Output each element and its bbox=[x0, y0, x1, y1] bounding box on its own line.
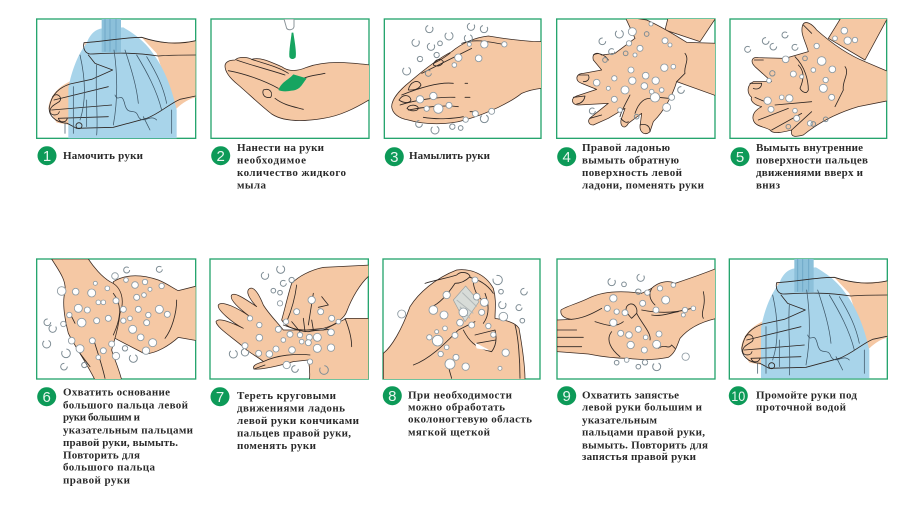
badge 4 bbox=[557, 147, 576, 166]
panel 2: applying liquid soap bbox=[211, 19, 370, 138]
badge 10: 10 bbox=[731, 388, 745, 404]
caption 6: руки большим и bbox=[63, 412, 141, 424]
caption 4: вымыть обратную bbox=[582, 154, 679, 166]
badge 4: 4 bbox=[563, 149, 571, 166]
caption 6 bbox=[63, 387, 194, 486]
badge 10 bbox=[729, 386, 748, 405]
caption 2: Нанести на руки bbox=[237, 142, 325, 154]
step 2 bbox=[211, 19, 370, 191]
badge 7 bbox=[210, 387, 230, 406]
caption 4: ладони, поменять руки bbox=[582, 179, 705, 191]
caption 10 bbox=[756, 389, 857, 414]
caption 7: левой руки кончиками bbox=[237, 415, 360, 427]
step 6 bbox=[37, 259, 197, 486]
caption 5: Вымыть внутренние bbox=[756, 142, 863, 154]
caption 7: поменять руки bbox=[237, 440, 317, 452]
step 9 bbox=[557, 259, 717, 463]
caption 2 bbox=[237, 142, 346, 191]
badge 7: 7 bbox=[216, 389, 224, 406]
badge 1 bbox=[38, 146, 56, 165]
caption 4: поверхность левой bbox=[582, 167, 683, 179]
caption 8: мягкой щеткой bbox=[408, 426, 491, 438]
caption 7: движениями ладонь bbox=[237, 403, 345, 415]
step 7 bbox=[210, 259, 370, 452]
step 5 bbox=[730, 17, 888, 191]
caption 6: большого пальца bbox=[63, 462, 156, 474]
step 4 bbox=[557, 17, 717, 191]
badge 2: 2 bbox=[217, 148, 225, 165]
caption 6: большого пальца левой bbox=[63, 399, 189, 411]
panel 4: washing back of left hand bbox=[557, 17, 717, 138]
badge 9 bbox=[557, 386, 576, 405]
caption 9: указательным bbox=[582, 414, 658, 426]
caption 9: пальцами правой руки, bbox=[582, 427, 705, 439]
caption 6: указательным пальцами bbox=[63, 424, 194, 436]
badge 8: 8 bbox=[388, 388, 396, 405]
badge 3: 3 bbox=[390, 149, 398, 166]
caption 9: левой руки большим и bbox=[582, 402, 703, 414]
badge 9: 9 bbox=[563, 388, 571, 405]
caption 8: околоногтевую область bbox=[408, 414, 532, 426]
panel 5: washing inner finger surfaces bbox=[730, 17, 888, 138]
badge 8 bbox=[383, 386, 402, 405]
caption 10: проточной водой bbox=[756, 402, 847, 414]
badge 1: 1 bbox=[43, 148, 51, 165]
step 3 bbox=[384, 19, 542, 166]
caption 7: пальцев правой руки, bbox=[237, 428, 351, 440]
caption 8: можно обработать bbox=[408, 402, 505, 414]
badge 3 bbox=[385, 147, 404, 166]
caption 10: Промойте руки под bbox=[756, 389, 857, 401]
step 1 bbox=[37, 19, 196, 165]
panel 10: rinsing under running water bbox=[729, 259, 888, 379]
step 10 bbox=[729, 259, 888, 414]
caption 5: поверхности пальцев bbox=[756, 154, 868, 166]
caption 2: мыла bbox=[237, 179, 266, 191]
caption 9: вымыть. Повторить для bbox=[582, 439, 708, 451]
badge 5 bbox=[730, 147, 750, 166]
badge 6 bbox=[37, 387, 56, 406]
caption 6: правой руки, вымыть. bbox=[63, 437, 178, 449]
caption 6: Повторить для bbox=[63, 449, 140, 461]
panel 1: wetting hands under water bbox=[37, 19, 196, 138]
caption 1: Намочить руки bbox=[63, 150, 144, 162]
caption 6: Охватить основание bbox=[63, 387, 170, 399]
caption 3: Намылить руки bbox=[409, 150, 491, 162]
caption 2: необходимое bbox=[237, 154, 306, 166]
caption 8 bbox=[408, 389, 532, 438]
caption 7: Тереть круговыми bbox=[237, 390, 337, 402]
step 8 bbox=[383, 259, 540, 438]
badge 2 bbox=[211, 146, 230, 165]
caption 4 bbox=[582, 142, 705, 191]
caption 9 bbox=[582, 389, 708, 463]
caption 6: правой руки bbox=[63, 474, 131, 486]
caption 9: Охватить запястье bbox=[582, 389, 679, 401]
panel 7: rubbing palm with fingertips bbox=[210, 259, 370, 382]
badge 5: 5 bbox=[736, 149, 744, 166]
caption 4: Правой ладонью bbox=[582, 142, 670, 154]
panel 8: brushing nail area bbox=[383, 259, 540, 380]
caption 8: При необходимости bbox=[408, 389, 513, 401]
caption 9: запястья правой руки bbox=[582, 451, 697, 463]
panel 9: grasping wrist bbox=[557, 259, 717, 379]
caption 5 bbox=[756, 142, 868, 191]
caption 5: вниз bbox=[756, 179, 781, 191]
badge 6: 6 bbox=[43, 389, 51, 406]
caption 7 bbox=[237, 390, 360, 452]
panel 3: lathering hands bbox=[384, 19, 542, 138]
panel 6: grasping base of thumb bbox=[37, 259, 197, 380]
caption 2: количество жидкого bbox=[237, 167, 346, 179]
caption 5: движениями вверх и bbox=[756, 167, 864, 179]
